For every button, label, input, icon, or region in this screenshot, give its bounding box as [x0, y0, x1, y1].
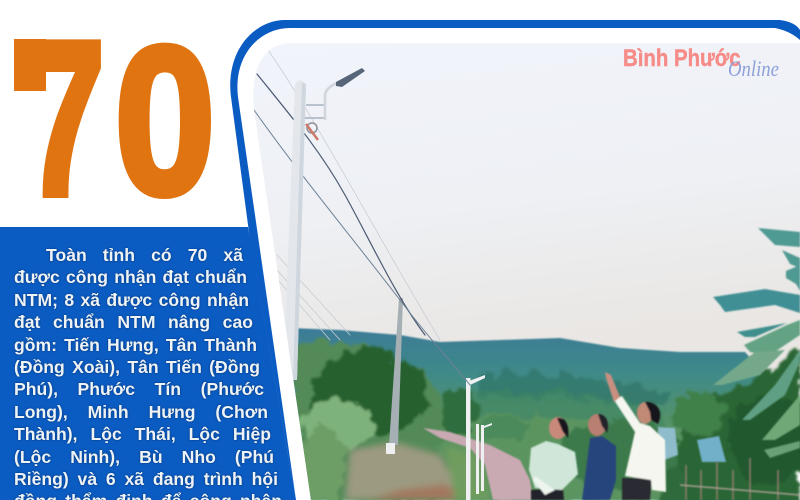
- paragraph text in blue panel: gồm: Tiến Hưng, Tân Thành: [14, 335, 257, 355]
- left tree mass: [290, 340, 445, 500]
- main concrete pole with lamp: [283, 68, 365, 380]
- paragraph text in blue panel: Long), Minh Hưng (Chơn: [14, 402, 268, 422]
- big orange number 70: 7: [25, 0, 105, 241]
- photo: rural road with street light and three men: [240, 40, 800, 500]
- paragraph text in blue panel: Thành), Lộc Thái, Lộc Hiệp: [14, 424, 271, 444]
- paragraph text in blue panel: Phú), Phước Tín (Phước: [14, 379, 264, 399]
- distant forested hills: [290, 328, 780, 500]
- paragraph text in blue panel: Riềng) và 6 xã đang trình hội: [14, 469, 278, 489]
- paragraph text in blue panel: Toàn tỉnh có 70 xã: [46, 245, 243, 265]
- person: middle man: [582, 414, 616, 500]
- road: [423, 428, 533, 500]
- paragraph text in blue panel: (Đồng Xoài), Tân Tiến (Đồng: [14, 357, 260, 377]
- big orange number 70: [14, 0, 215, 241]
- sky: [240, 40, 800, 370]
- paragraph text in blue panel: đạt chuẩn NTM nâng cao: [14, 312, 253, 332]
- tree cluster, right: [660, 350, 800, 500]
- overhead wires: [254, 50, 470, 385]
- paragraph text in blue panel: (Lộc Ninh), Bù Nho (Phú: [14, 447, 274, 467]
- paragraph text in blue panel: NTM; 8 xã được công nhận: [14, 290, 249, 310]
- grass verge and dirt: [345, 442, 490, 500]
- paragraph text in blue panel: được công nhận đạt chuẩn: [14, 267, 247, 287]
- logo: [624, 48, 778, 76]
- banana leaves: [713, 228, 800, 458]
- paragraph text in blue panel: [13, 245, 282, 500]
- big orange number 70: 0: [114, 3, 215, 239]
- far utility pole: [386, 298, 403, 454]
- mid forest bands: [430, 372, 680, 500]
- blue frame: [230, 20, 800, 500]
- blue text panel background: [0, 227, 296, 500]
- logo: Bình Phước: [623, 44, 741, 71]
- white frame interior: [237, 28, 800, 500]
- person: right man pointing up: [605, 372, 666, 500]
- small street lights along the road: [466, 375, 492, 500]
- logo: Online: [728, 56, 779, 81]
- blue house roofs: [658, 427, 726, 462]
- person: left man: [529, 417, 578, 500]
- fence: [680, 458, 800, 500]
